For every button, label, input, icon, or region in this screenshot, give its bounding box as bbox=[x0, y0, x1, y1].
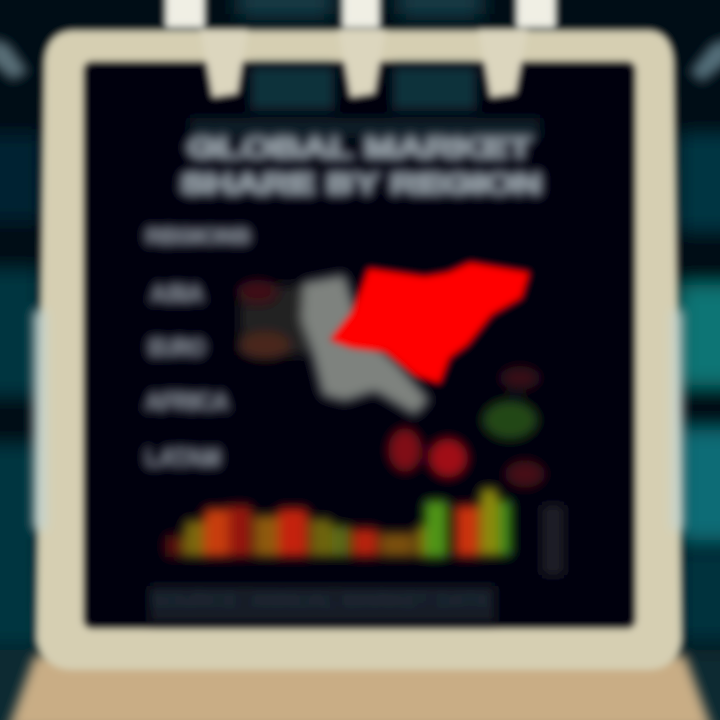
world map bbox=[238, 262, 545, 488]
clip 3 bbox=[478, 0, 556, 98]
calendar binder clips bbox=[165, 0, 556, 98]
teal strip at top of board bbox=[190, 66, 540, 138]
calendar frame bbox=[36, 30, 682, 670]
red southern blobs bbox=[388, 428, 468, 478]
dim landmass west bbox=[240, 285, 310, 355]
grey landmass bbox=[300, 274, 430, 416]
bottom wooden desk bbox=[8, 655, 712, 720]
black board panel bbox=[84, 62, 635, 628]
clip 2 bbox=[338, 0, 386, 98]
label 4: LATAM bbox=[145, 444, 221, 472]
large red region bbox=[330, 262, 530, 384]
legend heading: REGIONS bbox=[145, 223, 251, 249]
pale frame edge highlight bbox=[34, 310, 682, 530]
region labels bbox=[145, 223, 251, 472]
label 1: ASIA bbox=[150, 280, 204, 308]
label 3: AFRICA bbox=[145, 388, 229, 416]
title: GLOBAL MARKET bbox=[187, 130, 532, 165]
dark red western region bbox=[238, 280, 278, 304]
clip 1 bbox=[165, 0, 248, 98]
right axis labels bbox=[542, 505, 564, 575]
footer band and text: SOURCE: ANNUAL MARKET DATA bbox=[150, 588, 490, 613]
footer band and text bbox=[150, 586, 495, 622]
green and dark red eastern regions bbox=[482, 366, 545, 488]
grey wires at top corners bbox=[0, 38, 720, 82]
title bbox=[180, 130, 542, 201]
title: SHARE BY REGION bbox=[180, 166, 542, 201]
bar chart bbox=[165, 488, 512, 558]
label 2: EURO bbox=[148, 334, 206, 362]
brown western region bbox=[239, 331, 291, 359]
